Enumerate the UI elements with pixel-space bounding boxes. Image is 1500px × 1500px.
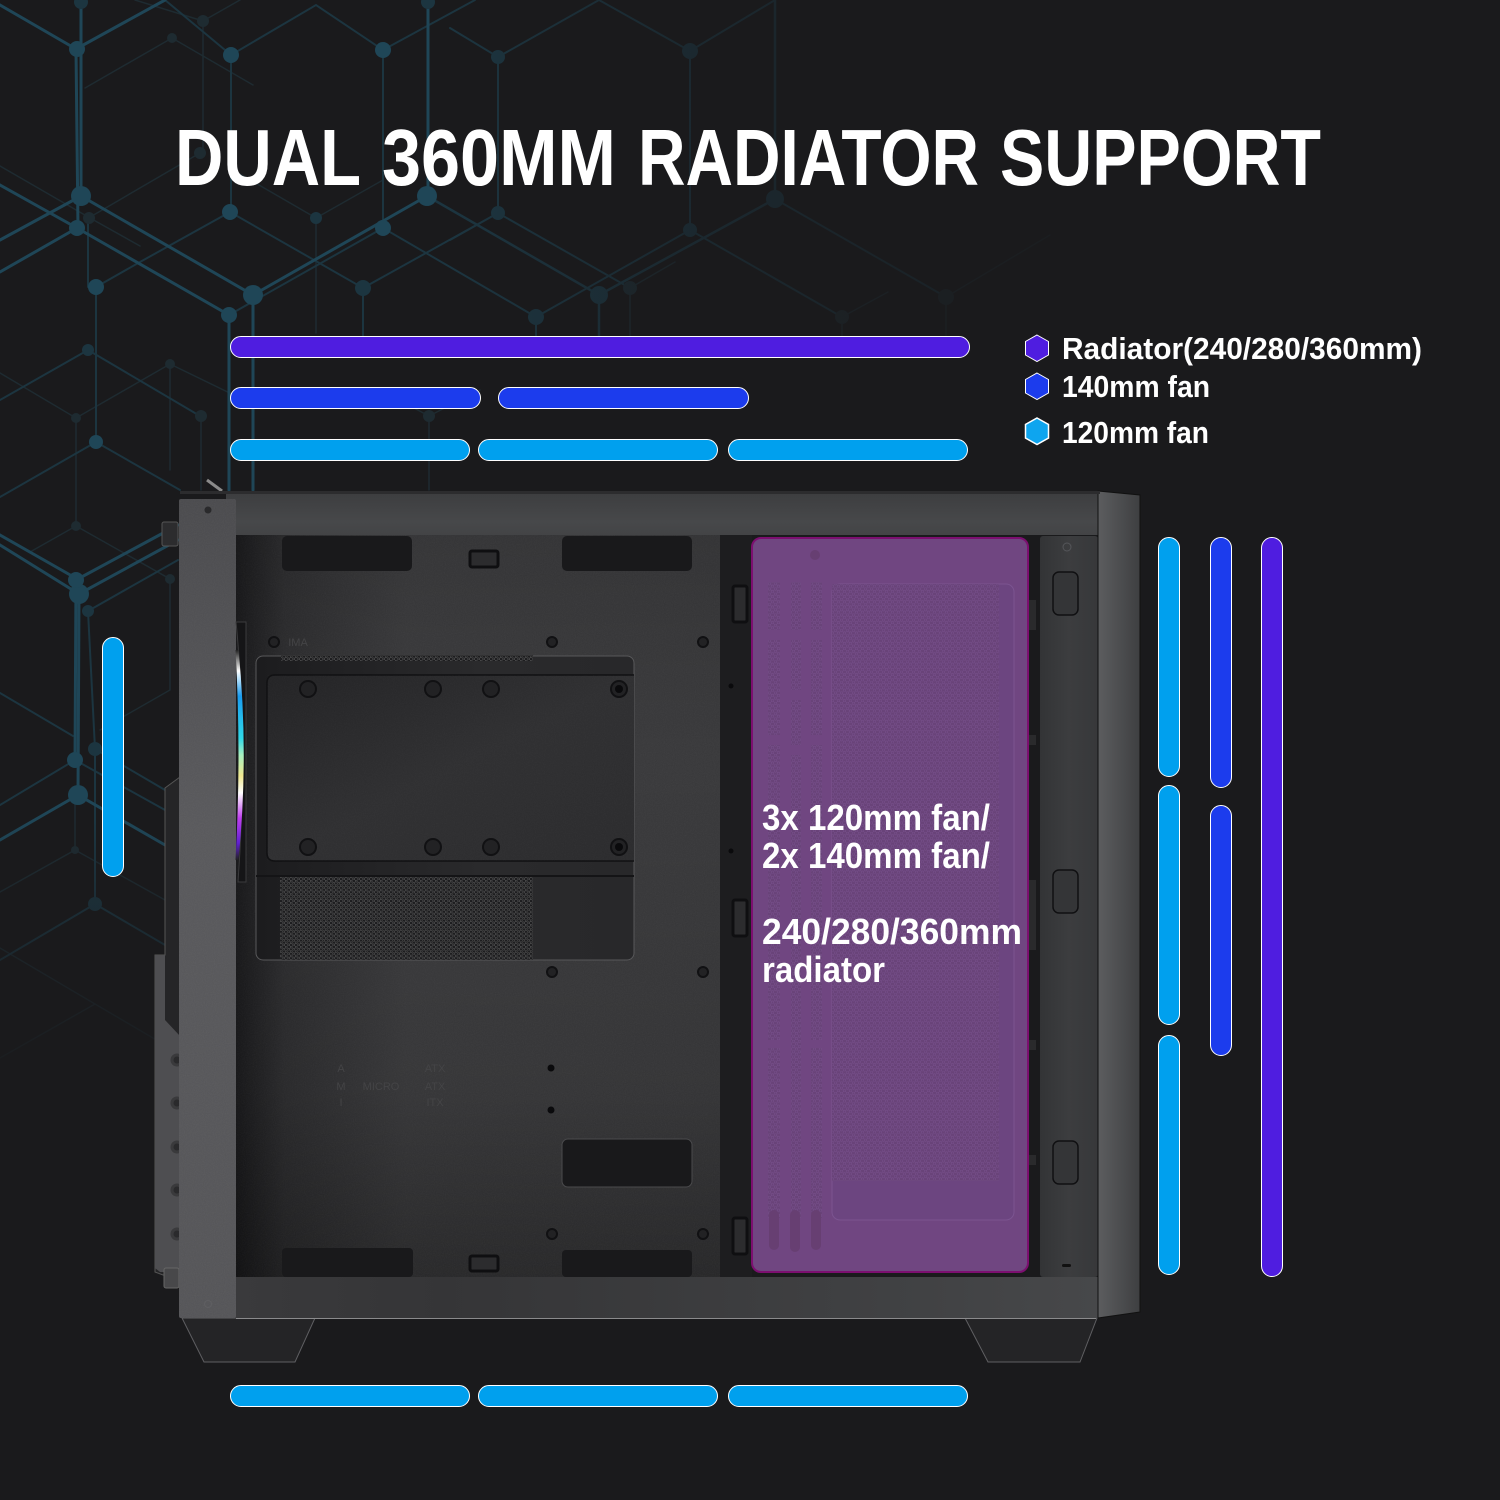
purple zone text: 240/280/360mm [762, 911, 1022, 952]
PC case [155, 480, 1140, 1362]
right 120mm fan bars [1158, 538, 1180, 1274]
faint tray markings: ITX [426, 1097, 444, 1109]
title: SUPPORT [1000, 113, 1321, 202]
screw holes [548, 684, 734, 1114]
right panel [1098, 491, 1140, 1318]
standoff screws [269, 637, 708, 1239]
right bracket handles [1053, 572, 1078, 1184]
RGB fan edge [236, 622, 246, 882]
radiator bar top [230, 336, 970, 358]
faint tray markings: I [339, 1097, 343, 1109]
140mm fan bars top [230, 388, 748, 408]
top bar [226, 491, 1100, 535]
strap on top of case [207, 480, 222, 491]
title: RADIATOR [638, 113, 979, 202]
120mm fan bars top [230, 440, 968, 460]
purple zone text: 2x 140mm fan/ [762, 835, 990, 876]
faint tray markings: MICRO [363, 1081, 400, 1093]
title [175, 113, 1321, 202]
legend item: 140mm fan: 140mm fan [1062, 369, 1210, 404]
left side: knobs and panels [155, 522, 182, 1288]
faint tray markings: ATX [425, 1081, 446, 1093]
faint tray markings [288, 637, 446, 1109]
purple zone text: 3x 120mm fan/ [762, 797, 990, 838]
title: DUAL [175, 113, 361, 202]
purple zone text: radiator [762, 949, 885, 990]
title: 360MM [382, 113, 616, 202]
legend item: radiator: Radiator(240/280/360mm) [1062, 331, 1422, 366]
bottom bar [226, 1277, 1100, 1318]
right strip [1028, 535, 1042, 1277]
background hexagon network [0, 0, 1050, 1058]
cable clips [470, 551, 747, 1271]
purple zone text [762, 797, 1022, 990]
right radiator bar [1262, 538, 1282, 1276]
legend [1026, 331, 1422, 450]
purple radiator zone [752, 538, 1028, 1272]
motherboard tray [236, 535, 720, 1277]
right bracket [1040, 536, 1098, 1277]
front panel [179, 499, 236, 1318]
right 140mm fan bars [1210, 538, 1232, 1056]
faint tray markings: ATX [425, 1063, 446, 1075]
faint tray markings: M [336, 1081, 346, 1093]
motherboard recess [256, 655, 634, 960]
case bottom edge [236, 1318, 1096, 1319]
case feet [182, 1318, 1097, 1362]
rear strip [720, 535, 752, 1277]
bracket details [1062, 543, 1071, 1267]
faint tray markings: IMA [288, 637, 308, 649]
bottom 120mm fan bars [230, 1386, 968, 1406]
left 120mm fan bar [102, 638, 124, 876]
case top edge [180, 491, 1100, 494]
faint tray markings: A [337, 1063, 345, 1075]
top fitting bars [230, 336, 970, 460]
legend item: 120mm fan: 120mm fan [1062, 415, 1209, 450]
tray cutouts [282, 536, 692, 1277]
